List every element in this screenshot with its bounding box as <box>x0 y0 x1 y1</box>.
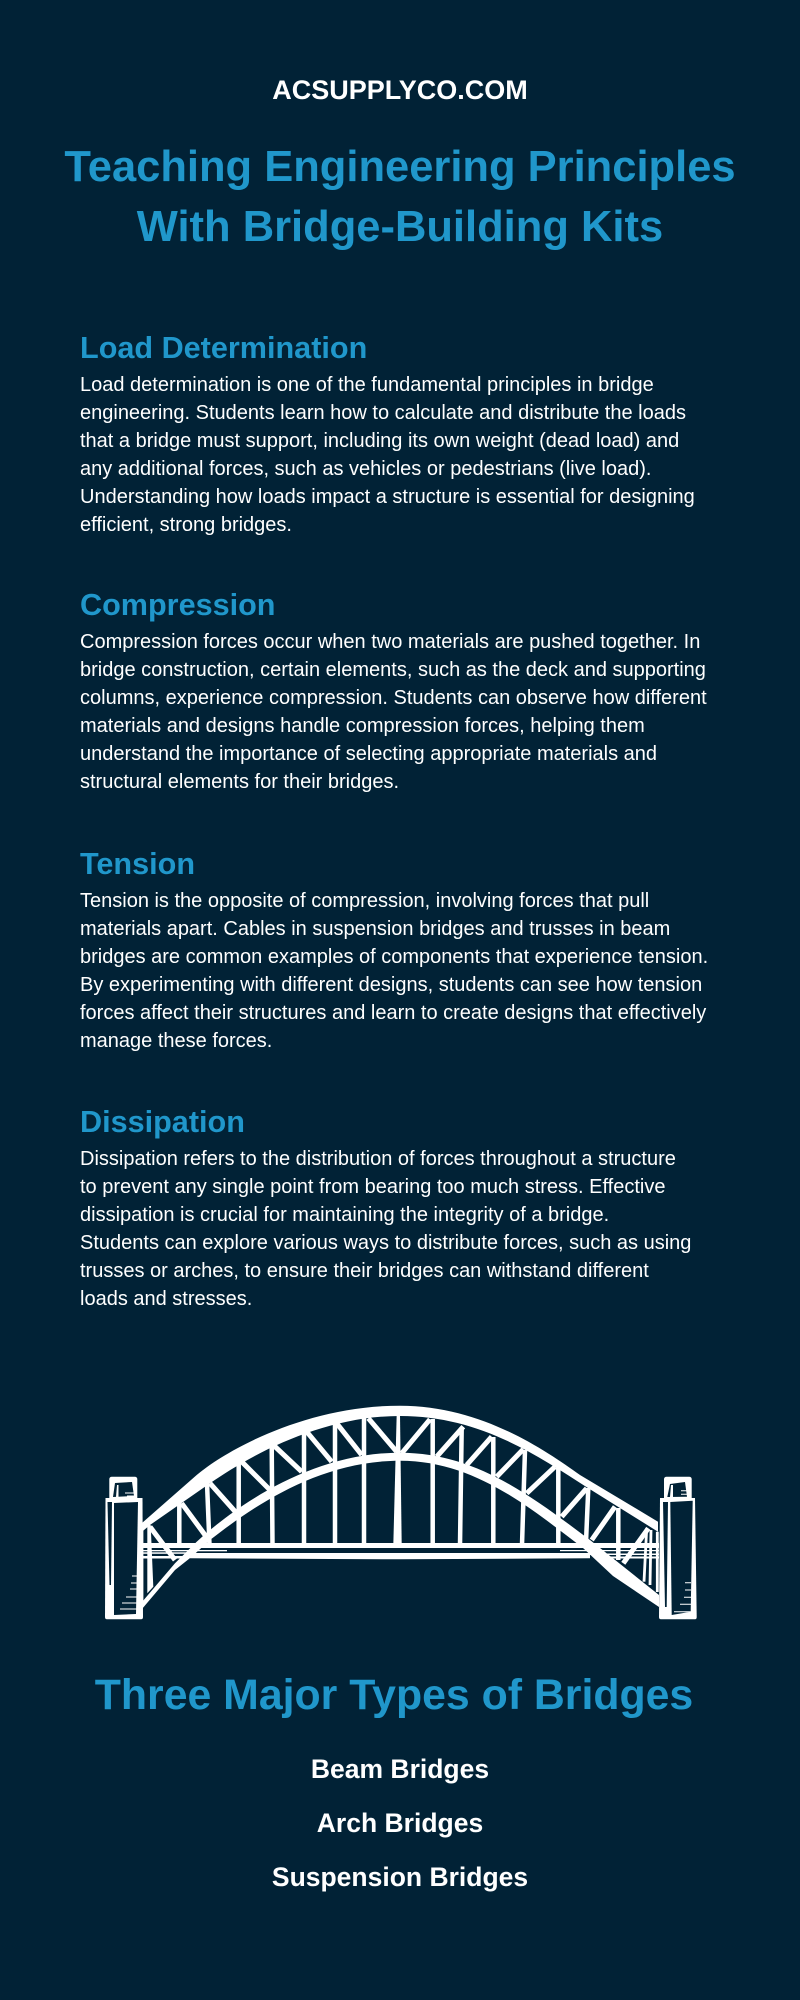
text: tension: materials apart. Cables in suspension bridges and trusses in beam <box>80 918 670 940</box>
panel: dissipation <box>80 1105 691 1310</box>
panel: load determination <box>80 331 695 536</box>
title: Teaching Engineering Principles <box>64 143 736 191</box>
text: compression: columns, experience compression. Students can observe how different <box>80 687 707 709</box>
text: load determination <box>80 374 695 536</box>
text: dissipation: loads and stresses. <box>80 1288 252 1310</box>
text: compression: bridge construction, certain elements, such as the deck and supporting <box>80 659 706 681</box>
heading: dissipation: Dissipation <box>80 1105 245 1139</box>
text: dissipation: dissipation is crucial for maintaining the integrity of a bridge. <box>80 1204 609 1226</box>
deck <box>142 1543 659 1559</box>
text: dissipation: Students can explore various ways to distribute forces, such as using <box>80 1232 691 1254</box>
panel: compression <box>80 588 707 793</box>
right tower <box>659 1477 697 1619</box>
truss diagonals <box>150 1418 648 1563</box>
text: dissipation <box>80 1148 691 1310</box>
text: dissipation: to prevent any single point from bearing too much stress. Effective <box>80 1176 666 1198</box>
title: With Bridge-Building Kits <box>137 203 663 251</box>
text: load determination: that a bridge must support, including its own weight (dead load) and <box>80 430 679 452</box>
text: tension: By experimenting with different designs, students can see how tension <box>80 974 702 996</box>
text: compression: structural elements for their bridges. <box>80 771 399 793</box>
heading: load determination: Load Determination <box>80 331 367 365</box>
list item: arch bridges: Arch Bridges <box>317 1808 483 1838</box>
text: compression: materials and designs handle compression forces, helping them <box>80 715 645 737</box>
text: compression: Compression forces occur when two materials are pushed together. In <box>80 631 700 653</box>
illustration: arch bridge <box>105 1406 697 1620</box>
heading: three major types of bridges: Three Major Types of Bridges <box>95 1671 693 1719</box>
site name: ACSUPPLYCO.COM <box>272 75 528 105</box>
panel: tension <box>80 847 708 1052</box>
upper arch <box>142 1406 658 1532</box>
text: dissipation: Dissipation refers to the distribution of forces throughout a structure <box>80 1148 676 1170</box>
heading: tension: Tension <box>80 847 195 881</box>
list item: beam bridges: Beam Bridges <box>311 1754 489 1784</box>
text: dissipation: trusses or arches, to ensure their bridges can withstand different <box>80 1260 649 1282</box>
lower arch <box>142 1453 659 1609</box>
end posts <box>142 1528 657 1606</box>
title <box>64 143 736 251</box>
left tower <box>105 1477 143 1619</box>
text: load determination: Load determination is one of the fundamental principles in bridge <box>80 374 654 396</box>
text: load determination: Understanding how loads impact a structure is essential for designing <box>80 486 695 508</box>
text: tension: manage these forces. <box>80 1030 272 1052</box>
center hanger <box>393 1414 402 1545</box>
text: load determination: any additional forces, such as vehicles or pedestrians (live load). <box>80 458 651 480</box>
vertical hangers <box>179 1417 618 1560</box>
text: tension: Tension is the opposite of compression, involving forces that pull <box>80 890 649 912</box>
left post <box>147 1525 153 1593</box>
text: tension <box>80 890 708 1052</box>
text: load determination: engineering. Students learn how to calculate and distribute the loads <box>80 402 686 424</box>
heading: compression: Compression <box>80 588 276 622</box>
text: tension: forces affect their structures and learn to create designs that effectively <box>80 1002 706 1024</box>
list item: suspension bridges: Suspension Bridges <box>272 1862 528 1892</box>
text: compression: understand the importance of selecting appropriate materials and <box>80 743 657 765</box>
text: tension: bridges are common examples of components that experience tension. <box>80 946 708 968</box>
text: load determination: efficient, strong bridges. <box>80 514 292 536</box>
text: compression <box>80 631 707 793</box>
